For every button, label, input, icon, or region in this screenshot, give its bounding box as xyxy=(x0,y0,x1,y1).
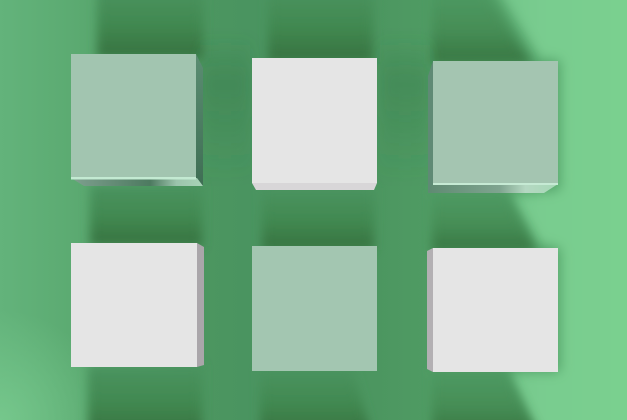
cube: top right, sage xyxy=(428,61,558,193)
cube: bottom right, white xyxy=(427,248,558,372)
cast shadows: middle row xyxy=(90,184,537,252)
cube: bottom left, white xyxy=(71,243,204,367)
cast shadows: top row xyxy=(97,0,532,64)
shade beside cubes xyxy=(200,40,430,180)
cube: top left, sage xyxy=(71,54,203,186)
cube: bottom middle, sage xyxy=(252,246,377,371)
cube: top middle, white xyxy=(252,58,377,190)
cast shadows: bottom row xyxy=(88,365,538,420)
